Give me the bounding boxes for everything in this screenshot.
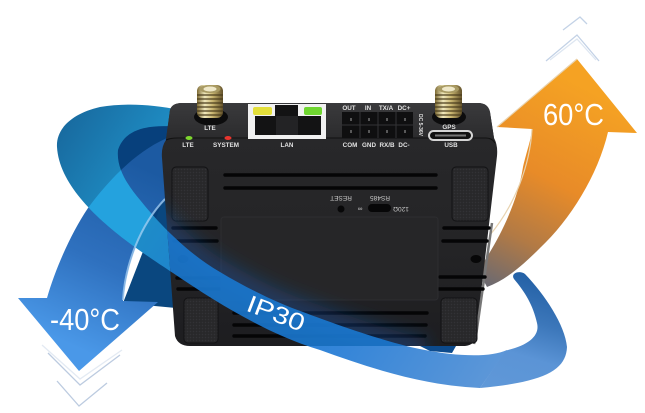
antenna: LTE connector [194, 85, 228, 126]
arrow: 60°C hot arrow [478, 59, 637, 287]
port labels: IN [365, 105, 372, 112]
RS485 switch and reset: 120Ω [393, 205, 409, 212]
port labels: OUT [342, 105, 356, 112]
RS485 switch and reset: ∞ [357, 205, 362, 212]
port labels: LAN [281, 142, 294, 149]
port: LAN socket [248, 104, 326, 139]
port labels: LTE [204, 125, 216, 132]
port: terminal block [342, 112, 413, 138]
port labels: GND [362, 142, 376, 149]
RS485 switch and reset [330, 194, 409, 212]
RS485 switch and reset: RS485 [370, 194, 390, 201]
label: 60 degrees: 60°C [543, 97, 604, 132]
port labels: GPS [442, 124, 456, 131]
port labels: DC- [398, 142, 410, 149]
indicator: LTE LED [186, 136, 192, 140]
port labels: USB [444, 142, 458, 149]
ventilation slots [173, 175, 489, 336]
center cover plate [221, 217, 438, 300]
port: USB-C socket [428, 130, 473, 141]
icon: downward chevrons below cold arrow [42, 345, 122, 406]
port labels: RX/B [379, 142, 395, 149]
port labels: COM [343, 142, 357, 149]
antenna: GPS connector [432, 85, 466, 126]
port labels: TX/A [379, 105, 394, 112]
screw holes [178, 255, 482, 263]
icon: upward chevrons above hot arrow [546, 17, 599, 61]
port labels [182, 105, 458, 149]
port labels: DC+ [398, 105, 411, 112]
port labels: LTE [182, 142, 194, 149]
port labels: SYSTEM [213, 142, 239, 149]
RS485 switch and reset: RESET [330, 194, 352, 201]
band: IP30 swoosh ring behind device [47, 105, 567, 388]
indicator: SYSTEM LED [224, 136, 232, 140]
label: IP30 rating: IP30 [243, 291, 309, 337]
label: minus 40 degrees: -40°C [50, 302, 120, 337]
band: IP30 swoosh front overlay on device [165, 198, 434, 346]
device: router body [162, 85, 497, 346]
rubber feet [172, 167, 488, 343]
port labels: DC 5-36V [417, 114, 423, 137]
arrow: -40°C cold arrow [18, 114, 180, 371]
